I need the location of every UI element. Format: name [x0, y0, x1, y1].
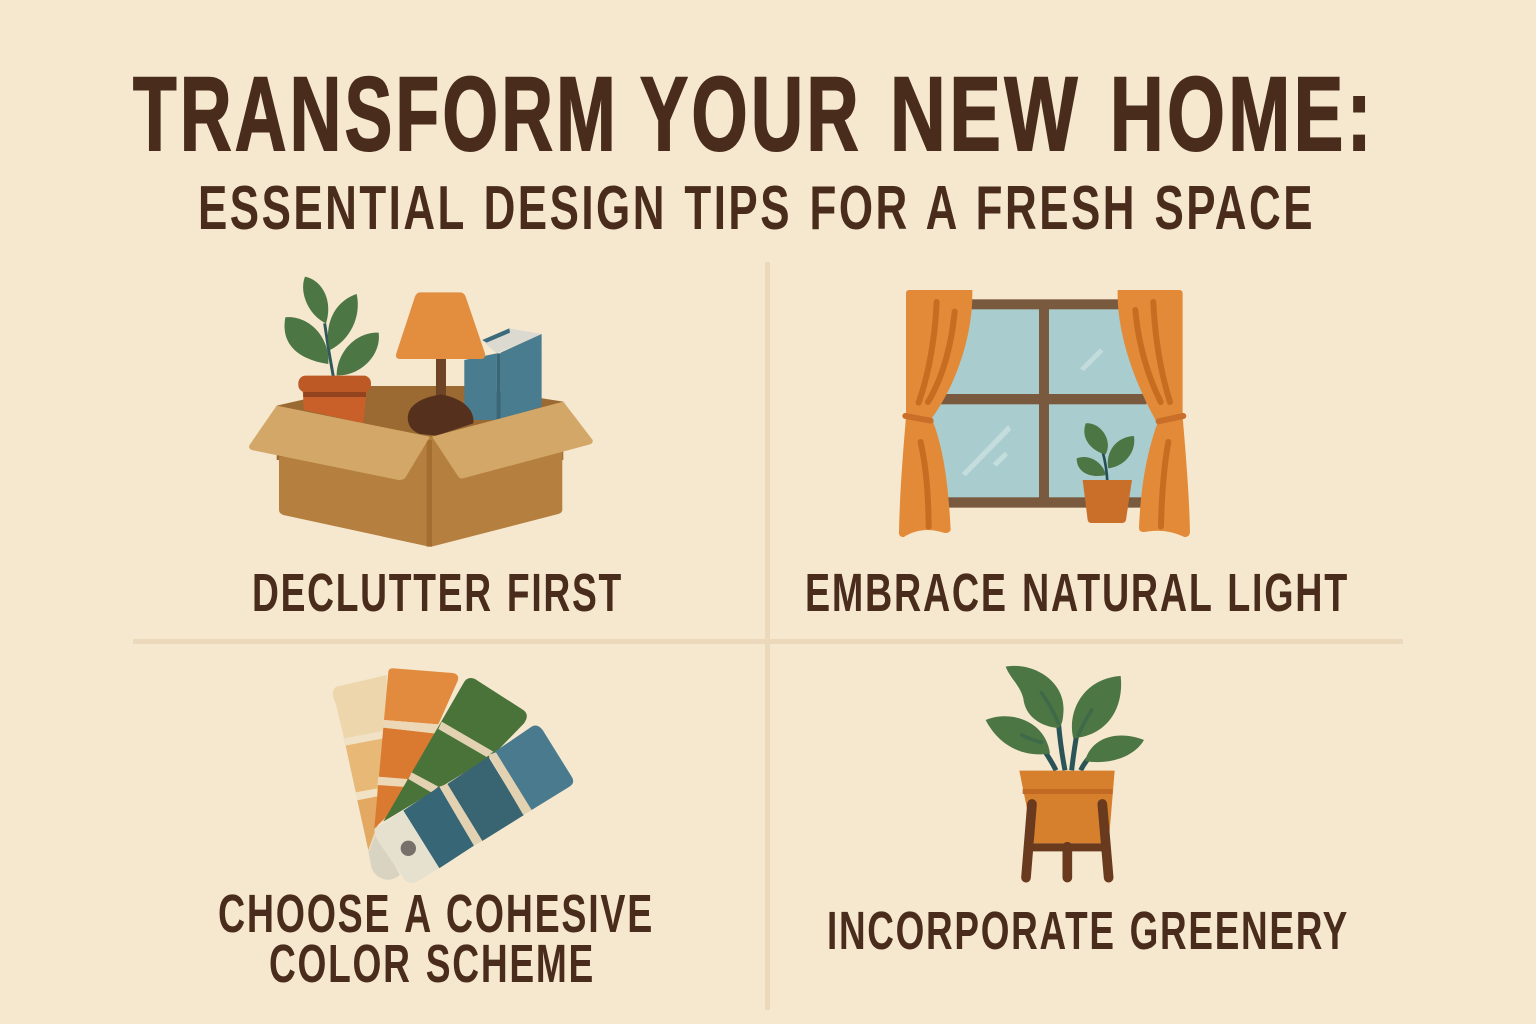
- title: YOUR: [640, 56, 862, 173]
- swatch: green: [383, 678, 527, 822]
- panel: choose a cohesive color scheme: [218, 668, 654, 994]
- icon: table lamp: [396, 292, 485, 436]
- icon: potted plant: [285, 277, 379, 423]
- label: choose a cohesive color scheme: CHOOSE A COHESIVE: [218, 884, 654, 944]
- icon: right curtain: [1118, 290, 1190, 537]
- swatch: cream to tan: [333, 675, 387, 850]
- panel: declutter first: [249, 277, 623, 623]
- icon: cardboard box with plant, lamp and books: [249, 277, 593, 547]
- label: choose a cohesive color scheme: [218, 884, 654, 994]
- swatch: blue: [403, 726, 573, 868]
- icon: book: [464, 328, 542, 420]
- panel: embrace natural light: [805, 290, 1349, 623]
- swatch: orange: [374, 668, 458, 828]
- icon: plant on wooden stand: [986, 666, 1144, 878]
- icon: small plant: [1077, 423, 1134, 523]
- panel: incorporate greenery: [827, 666, 1349, 961]
- title: TRANSFORM: [133, 56, 619, 173]
- icon: paint swatch fan: [333, 668, 573, 883]
- title: HOME:: [1110, 56, 1375, 173]
- label: choose a cohesive color scheme: COLOR SCHEME: [269, 934, 595, 994]
- title: NEW: [890, 56, 1081, 173]
- label: declutter first: DECLUTTER FIRST: [252, 563, 623, 623]
- swatch tag with hole: [368, 811, 439, 883]
- icon: window with curtains and plant: [899, 290, 1190, 537]
- icon: left curtain: [899, 290, 972, 537]
